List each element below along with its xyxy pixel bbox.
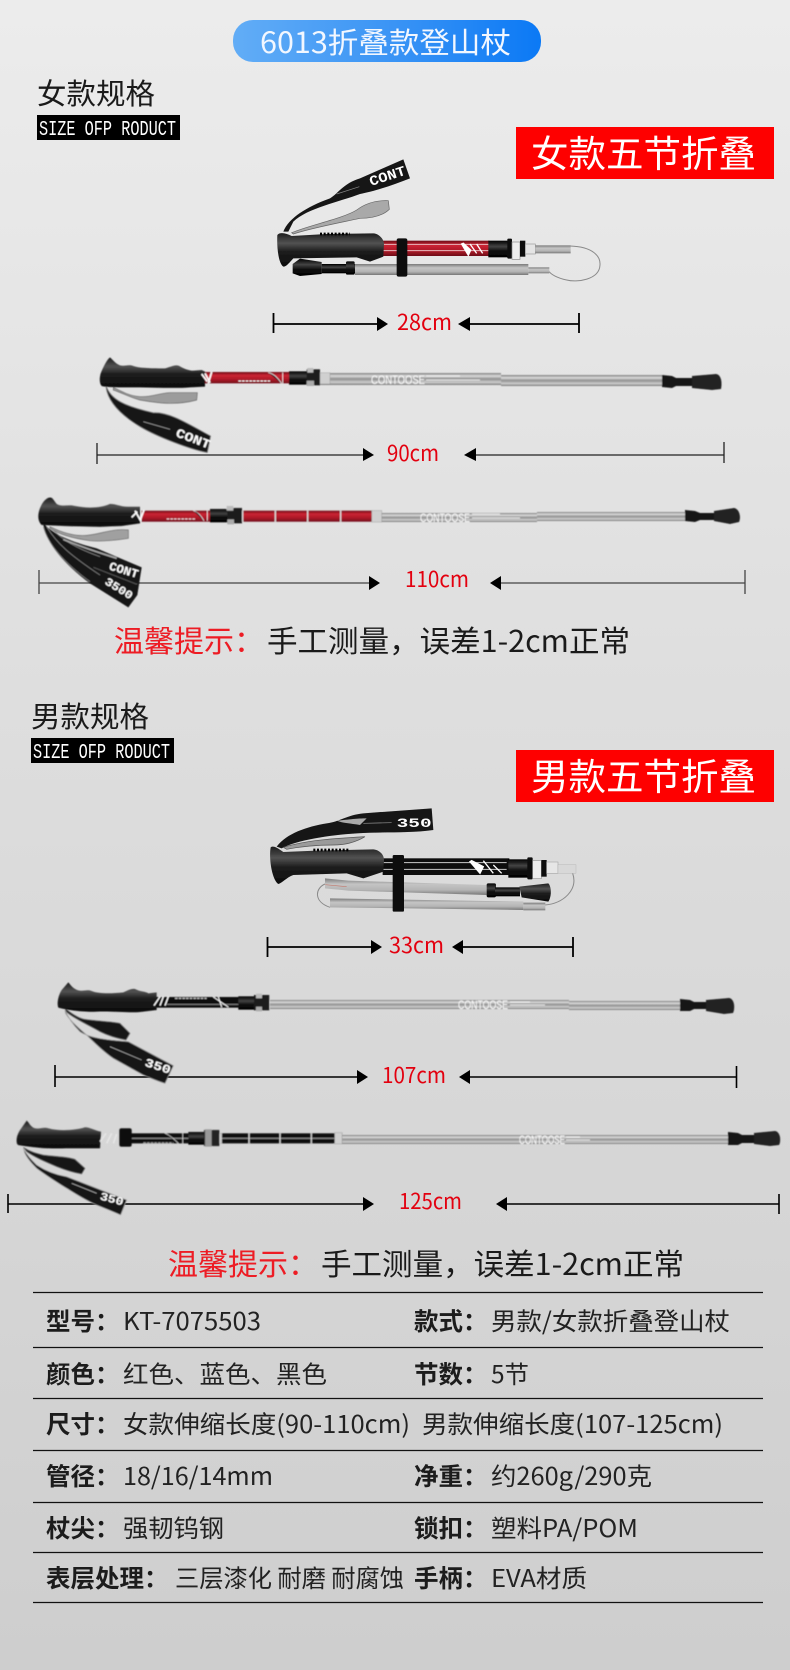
pole: women's 90cm [100,357,721,453]
tip note: men's: 手工测量，误差1-2cm正常 [321,1240,684,1284]
subheading tag: men's [31,738,174,765]
pole: men's folded: 350 [397,816,432,831]
dimension: 90cm: 90cm [387,436,439,468]
row: tube diameter and net weight: 管径： [46,1458,120,1493]
dimension: 125cm: 125cm [399,1184,462,1216]
row: tip and lock: 塑料PA/POM [491,1510,638,1545]
dimension: 28cm [274,305,579,337]
row: surface treatment and handle [46,1560,587,1595]
pole: women's folded: CONT [368,164,408,191]
row: tube diameter and net weight: 净重： [414,1458,488,1493]
row: tube diameter and net weight: 约260g/290克 [491,1458,652,1493]
row: model and style: 款式： [414,1303,488,1338]
dimension: 110cm [39,562,745,594]
heading: women's spec: 女款规格 [37,71,155,113]
row: colour and sections: 颜色： [46,1356,120,1391]
badge: men's five-section folding: 男款五节折叠 [531,747,756,801]
dimension: 90cm [97,436,724,468]
row: surface treatment and handle: 表层处理： [46,1560,168,1595]
row: tip and lock: 锁扣： [414,1510,488,1545]
pole: women's 90cm: CONT [174,426,213,453]
pole: men's 107cm: CONTOOSE [458,998,508,1012]
spec table [33,1292,763,1602]
dimension: 107cm [55,1058,736,1090]
row: model and style [46,1303,730,1338]
row: surface treatment and handle: 三层漆化 耐磨 耐腐蚀 [175,1560,404,1595]
pole: men's 107cm [58,982,734,1083]
tip note: men's: 温馨提示： [168,1240,318,1284]
dimension: 33cm: 33cm [389,928,444,960]
pole: men's 125cm: 350 [98,1192,125,1209]
row: model and style: 男款/女款折叠登山杖 [491,1303,730,1338]
pole: women's 110cm: 3500 [102,577,134,603]
pole: women's folded [277,159,600,281]
row: size: 男款伸缩长度(107-125cm) [422,1406,723,1441]
row: colour and sections [46,1356,529,1391]
dimension: 125cm [8,1184,779,1216]
row: tube diameter and net weight: 18/16/14mm [123,1458,273,1493]
pole: women's 110cm [38,497,740,607]
pole: men's 125cm: CONTOOSE [519,1133,565,1147]
row: size: 女款伸缩长度(90-110cm) [123,1406,410,1441]
title pill: 6013折叠款登山杖 [260,20,511,62]
row: model and style: 型号： [46,1303,120,1338]
row: size [46,1406,723,1441]
pole: men's folded [270,808,576,912]
pole: women's 110cm: CONT [107,560,140,582]
subheading tag: women's: SIZE OFP RODUCT [39,119,176,142]
row: tip and lock [46,1510,638,1545]
tip note: women's: 手工测量，误差1-2cm正常 [267,617,630,661]
pole: women's 90cm: CONTOOSE [371,373,425,387]
subheading tag: women's [37,115,180,142]
pole: men's 125cm [17,1121,780,1215]
row: size: 尺寸： [46,1406,120,1441]
tip note: women's: 温馨提示： [114,617,264,661]
dimension: 33cm [268,928,573,960]
row: tip and lock: 杖尖： [46,1510,120,1545]
dimension: 28cm: 28cm [397,305,452,337]
row: tube diameter and net weight [46,1458,652,1493]
pole: women's 110cm: CONTOOSE [420,511,470,525]
tip note: men's [168,1240,684,1284]
badge: women's five-section folding: 女款五节折叠 [531,124,756,178]
row: colour and sections: 节数： [414,1356,488,1391]
dimension: 110cm: 110cm [405,562,469,594]
dimension: 107cm: 107cm [382,1058,446,1090]
row: colour and sections: 红色、蓝色、黑色 [123,1356,327,1391]
row: surface treatment and handle: EVA材质 [491,1560,587,1595]
pole: men's 107cm: 350 [143,1056,172,1078]
row: tip and lock: 强韧钨钢 [123,1510,224,1545]
subheading tag: men's: SIZE OFP RODUCT [33,742,170,765]
row: model and style: KT-7075503 [123,1303,261,1338]
heading: men's spec: 男款规格 [31,694,149,736]
tip note: women's [114,617,630,661]
row: colour and sections: 5节 [491,1356,529,1391]
row: surface treatment and handle: 手柄： [414,1560,488,1595]
